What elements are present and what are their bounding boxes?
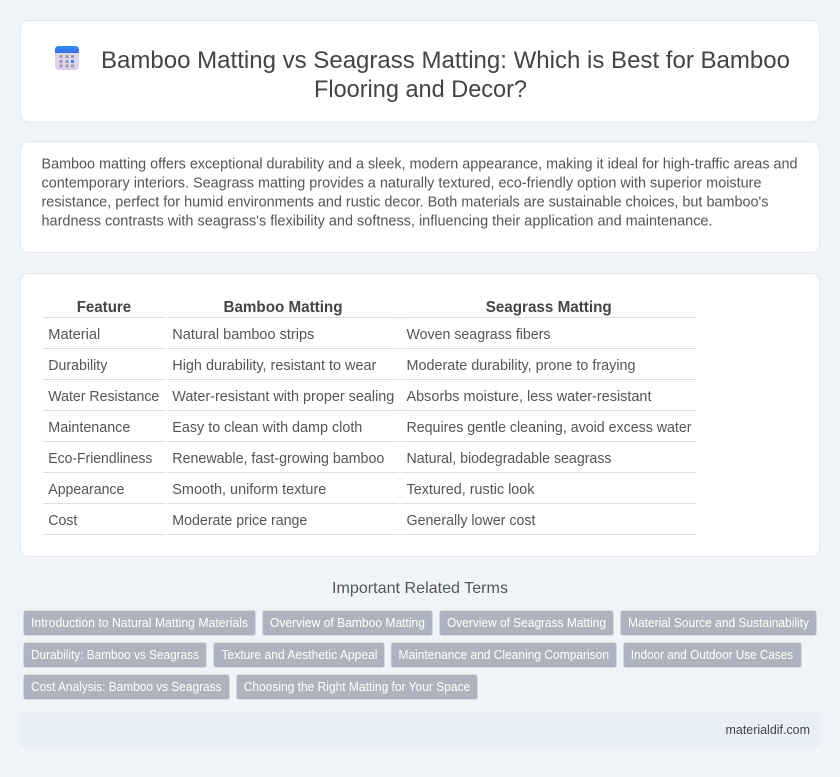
- tag: introduction: Introduction to Natural Matting Materials: [31, 616, 248, 630]
- table row: maintenance: Maintenance: [48, 420, 130, 436]
- table row: durability: Moderate durability, prone to fraying: [406, 358, 636, 374]
- tag: overview seagrass: [440, 610, 614, 636]
- table row: eco-friendliness: Natural, biodegradable seagrass: [406, 451, 612, 467]
- table header row: Feature: [77, 299, 132, 316]
- related term tags: [24, 610, 816, 700]
- table row: appearance: Textured, rustic look: [406, 482, 535, 498]
- tag: cost analysis: [24, 674, 230, 700]
- text block: introduction paragraph: hardness contrasts with seagrass's flexibility and softness, influencing their application and maintenance.: [42, 214, 712, 230]
- table row: eco-friendliness: [48, 451, 612, 467]
- table row: cost: Generally lower cost: [406, 513, 536, 529]
- tag: material source: Material Source and Sustainability: [628, 616, 810, 630]
- panel: comparison table: [20, 274, 820, 556]
- table row: cost: Moderate price range: [172, 513, 307, 529]
- tag: overview seagrass: Overview of Seagrass Matting: [447, 616, 606, 630]
- table row: material: Material: [48, 327, 100, 343]
- panel: header: [20, 20, 820, 122]
- table header row: [77, 299, 612, 316]
- table row: material: Natural bamboo strips: [172, 327, 314, 343]
- text block: introduction paragraph: [42, 156, 798, 230]
- table header row: Seagrass Matting: [486, 299, 612, 316]
- table row: water resistance: [48, 389, 652, 405]
- heading: important related terms: Important Related Terms: [332, 580, 508, 597]
- table header row: Bamboo Matting: [224, 299, 342, 316]
- tag: durability: [24, 642, 206, 668]
- table row: eco-friendliness: Eco-Friendliness: [48, 451, 152, 467]
- table row: water resistance: Absorbs moisture, less water-resistant: [406, 389, 652, 405]
- table row: cost: Cost: [48, 513, 77, 529]
- table row: durability: [48, 358, 636, 374]
- table row: water resistance: Water-resistant with proper sealing: [172, 389, 394, 405]
- tag: durability: Durability: Bamboo vs Seagrass: [31, 648, 199, 662]
- tag: indoor outdoor: [624, 642, 802, 668]
- table row: eco-friendliness: Renewable, fast-growing bamboo: [172, 451, 384, 467]
- tag: texture: Texture and Aesthetic Appeal: [222, 648, 378, 662]
- tag: cost analysis: Cost Analysis: Bamboo vs Seagrass: [31, 680, 222, 694]
- text block: introduction paragraph: resistance, perfect for humid environments and rustic decor. Both materials are sustainable choices, but bamboo's: [42, 194, 768, 210]
- title: Flooring and Decor?: [314, 76, 527, 103]
- tag: maintenance: [391, 642, 616, 668]
- table row: water resistance: Water Resistance: [48, 389, 159, 405]
- table row: material: [48, 327, 551, 343]
- table row: appearance: Smooth, uniform texture: [172, 482, 326, 498]
- tag: material source: [620, 610, 816, 636]
- text block: introduction paragraph: Bamboo matting offers exceptional durability and a sleek, modern appearance, making it ideal for high-traffic areas and: [42, 156, 798, 172]
- tag: overview bamboo: Overview of Bamboo Matting: [270, 616, 425, 630]
- tag: introduction: [24, 610, 256, 636]
- icon: calendar: [55, 46, 79, 70]
- table row: appearance: [48, 482, 535, 498]
- table row: durability: High durability, resistant to wear: [172, 358, 376, 374]
- table row: maintenance: Easy to clean with damp cloth: [172, 420, 362, 436]
- tag: texture: [214, 642, 384, 668]
- tag: indoor outdoor: Indoor and Outdoor Use Cases: [631, 648, 793, 662]
- footer: materialdif.com: [726, 723, 810, 737]
- text block: introduction paragraph: contemporary interiors. Seagrass matting provides a naturally textured, eco-friendly option with superior moisture: [42, 175, 762, 191]
- footer: [20, 713, 820, 747]
- title: [101, 47, 790, 103]
- tag: choosing: Choosing the Right Matting for Your Space: [244, 680, 470, 694]
- tag: choosing: [236, 674, 478, 700]
- table row: material: Woven seagrass fibers: [406, 327, 550, 343]
- table row: appearance: Appearance: [48, 482, 124, 498]
- table row: durability: Durability: [48, 358, 108, 374]
- table row: maintenance: [48, 420, 692, 436]
- table row: maintenance: Requires gentle cleaning, avoid excess water: [406, 420, 692, 436]
- tag: overview bamboo: [262, 610, 432, 636]
- panel: introduction: [20, 142, 820, 252]
- table row: cost: [48, 513, 536, 529]
- title: Bamboo Matting vs Seagrass Matting: Which is Best for Bamboo: [101, 47, 790, 74]
- tag: maintenance: Maintenance and Cleaning Comparison: [398, 648, 609, 662]
